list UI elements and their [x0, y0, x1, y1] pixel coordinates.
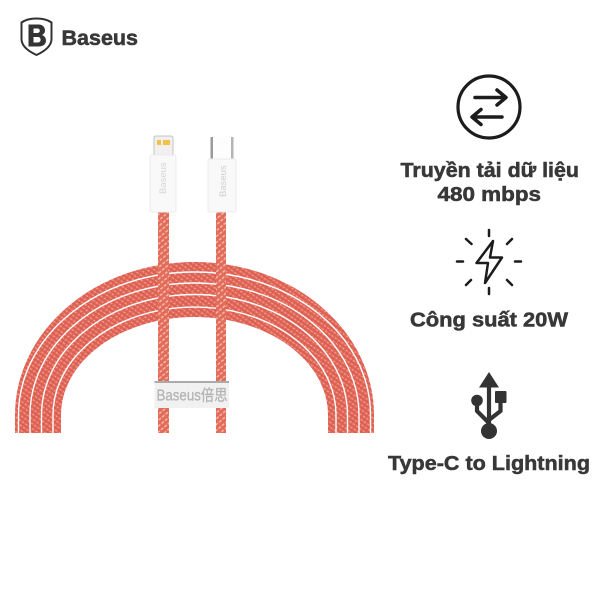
- product: braided cable: [15, 136, 374, 433]
- feature: power: [410, 230, 568, 332]
- icon: transfer arrows in circle: [458, 76, 520, 138]
- text: data rate: 480 mbps: [438, 184, 541, 206]
- logo: Baseus: [22, 18, 138, 55]
- right vertical cable: [216, 210, 226, 433]
- icon: USB symbol: [471, 372, 506, 439]
- text: data rate: [400, 160, 579, 206]
- cable label band: [154, 381, 229, 408]
- icon: lightning bolt with rays: [457, 230, 521, 294]
- USB-C connector: Baseus: [218, 165, 229, 197]
- cable coil: [15, 262, 374, 433]
- left vertical cable: [158, 210, 169, 433]
- text: cable type: Type-C to Lightning: [388, 452, 590, 475]
- text: power rating: Công suất 20W: [410, 310, 568, 332]
- lightning connector: [150, 136, 176, 212]
- USB-C connector: [208, 137, 236, 212]
- feature: connector type: [388, 372, 590, 475]
- icon: shield: [22, 18, 52, 55]
- logo wordmark: Baseus: [62, 26, 138, 50]
- lightning connector: Baseus: [158, 162, 169, 194]
- feature: data transfer: [400, 76, 579, 206]
- text: data rate: Truyền tải dữ liệu: [400, 160, 579, 182]
- cable label band: Baseus倍思: [156, 386, 228, 404]
